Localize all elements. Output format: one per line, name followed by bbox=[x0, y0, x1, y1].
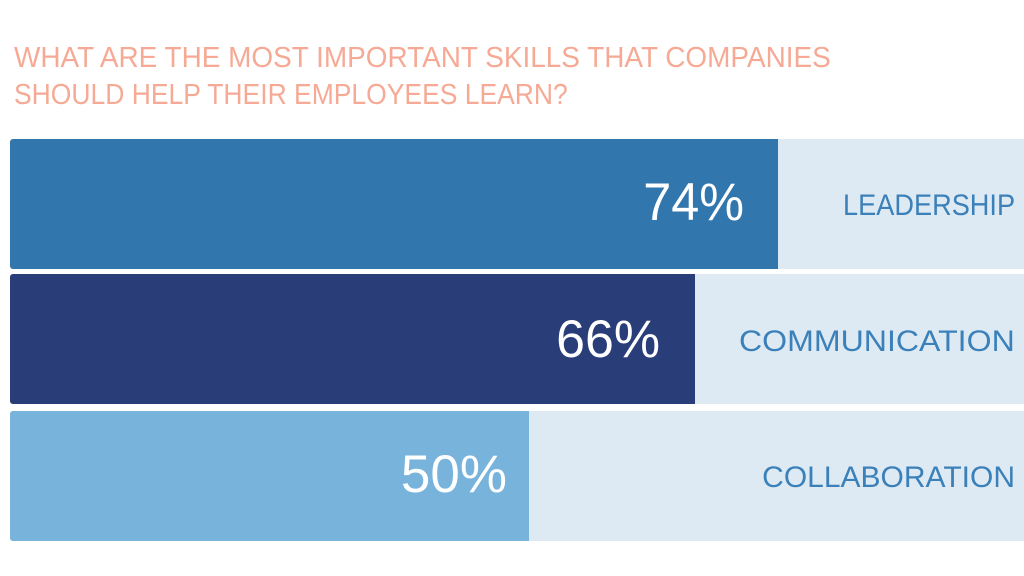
bar: collaboration 50% bbox=[10, 411, 529, 541]
title: SHOULD HELP THEIR EMPLOYEES LEARN? bbox=[14, 79, 568, 111]
bar: communication 66% bbox=[10, 274, 695, 404]
bar: leadership 74% bbox=[10, 139, 778, 269]
value: 66%: 66% bbox=[556, 310, 660, 369]
label: communication: COMMUNICATION bbox=[739, 325, 1015, 358]
value: 50%: 50% bbox=[401, 445, 507, 504]
label: collaboration: COLLABORATION bbox=[762, 461, 1015, 494]
label: leadership: LEADERSHIP bbox=[843, 189, 1015, 222]
bar row: leadership bbox=[10, 139, 1024, 269]
bar row: communication bbox=[10, 274, 1024, 404]
bar row: collaboration bbox=[10, 411, 1024, 541]
title bbox=[14, 42, 831, 111]
title: WHAT ARE THE MOST IMPORTANT SKILLS THAT COMPANIES bbox=[14, 42, 831, 74]
value: 74%: 74% bbox=[643, 173, 744, 232]
